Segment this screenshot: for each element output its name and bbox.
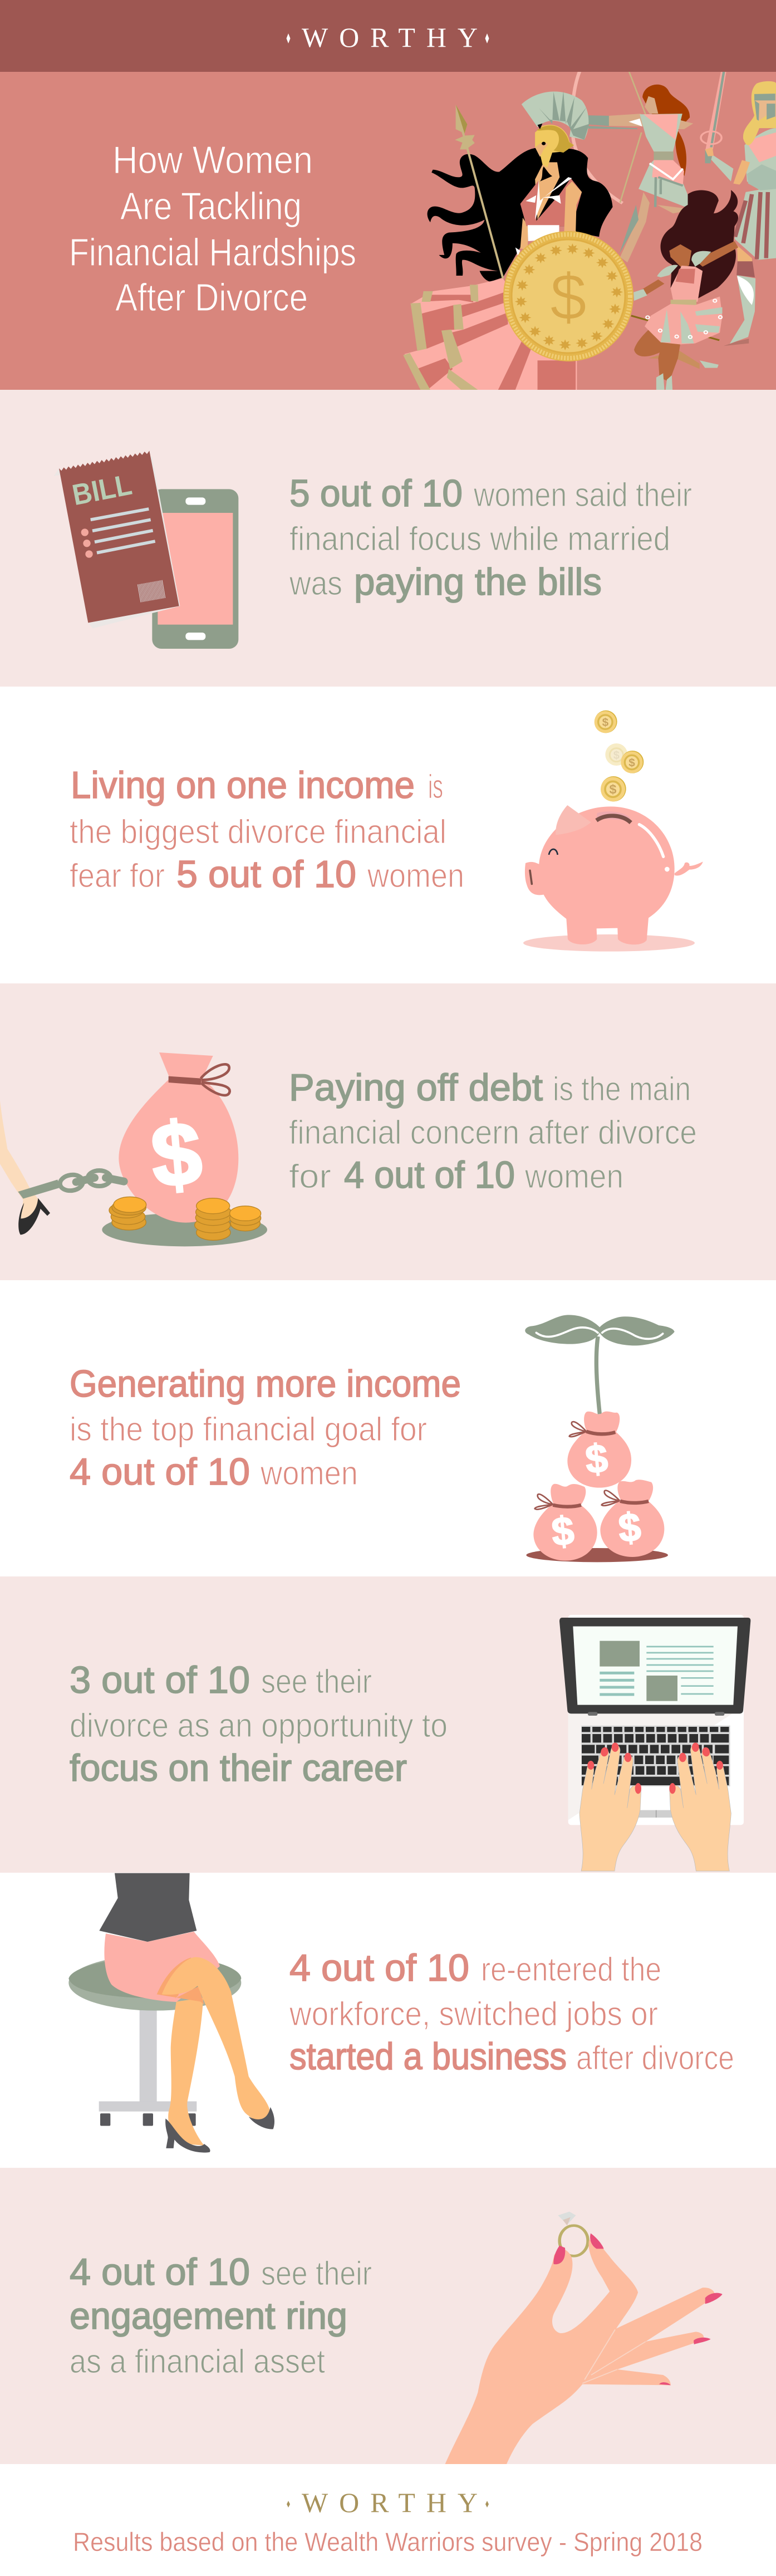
- bill label: BILL: [70, 468, 135, 512]
- shield: gold coin: $: [550, 261, 587, 334]
- panel: living on one income: [0, 687, 776, 983]
- icon: laptop with typing hands: [559, 1615, 750, 1871]
- icon: piggy bank with coins: [523, 711, 703, 952]
- nails: [553, 2234, 723, 2385]
- money bag: right: $: [617, 1505, 642, 1551]
- statement text: is the top financial goal for: [70, 1411, 427, 1448]
- statement text: engagement ring: [70, 2295, 347, 2337]
- icon: money bag chained to ankle: $: [148, 1103, 205, 1206]
- statement text: the biggest divorce financial: [70, 813, 446, 850]
- panel: focus on career: [0, 1576, 776, 1873]
- panel: re-entered the workforce: [0, 1873, 776, 2168]
- statement text: for: [289, 1158, 331, 1195]
- illustration: warrior women: [403, 71, 776, 390]
- statement text: [70, 1363, 461, 1493]
- statement text: is the main: [553, 1070, 691, 1108]
- statement text: focus on their career: [70, 1747, 407, 1789]
- money bag: left: [533, 1484, 597, 1561]
- statement text: [70, 2251, 372, 2380]
- statement text: [289, 1066, 697, 1196]
- archer: [587, 85, 694, 262]
- shield: gold coin: [503, 231, 633, 361]
- statement text: 5 out of 10: [176, 853, 356, 895]
- statement text: [70, 764, 464, 895]
- money bag: top: $: [583, 1436, 610, 1482]
- statement text: Living on one income: [71, 764, 415, 806]
- statement text: 5 out of 10: [289, 472, 463, 515]
- statement text: started a business: [289, 2035, 567, 2078]
- statement text: [70, 1659, 448, 1789]
- statement text: [289, 1947, 734, 2078]
- statement text: women: [524, 1158, 623, 1195]
- falling coins: $: [613, 750, 620, 762]
- icon: money bags with sprout: [525, 1315, 675, 1562]
- money bag: right: [600, 1480, 664, 1557]
- statement text: is: [428, 768, 443, 805]
- statement text: 4 out of 10: [70, 1451, 250, 1493]
- statement text: women: [367, 857, 464, 894]
- crossed leg: [157, 1957, 274, 2129]
- dancer warrior: [631, 190, 738, 390]
- money bag: top: [567, 1412, 631, 1488]
- laptop: [559, 1615, 750, 1825]
- statement text: see their: [261, 2255, 372, 2292]
- main warrior body: [515, 162, 582, 256]
- title: How Women: [112, 138, 313, 182]
- panel: paying off debt: [0, 983, 776, 1280]
- falling coins: $: [610, 782, 617, 797]
- statement text: paying the bills: [354, 561, 602, 603]
- statement text: see their: [261, 1663, 372, 1700]
- bow and string: [572, 71, 646, 203]
- top: [99, 1873, 197, 1942]
- title: Financial Hardships: [69, 231, 356, 274]
- title: [69, 138, 356, 319]
- falling coins: [595, 711, 644, 801]
- right hand: [669, 1742, 731, 1871]
- icon: hand holding ring: [445, 2212, 723, 2464]
- statement text: 4 out of 10: [344, 1154, 515, 1196]
- hand: [445, 2240, 715, 2464]
- header band with logo: [0, 0, 776, 72]
- skirt: [104, 1932, 220, 2002]
- statement text: financial concern after divorce: [289, 1114, 697, 1151]
- main warrior hair: [428, 148, 613, 282]
- statement text: as a financial asset: [70, 2343, 325, 2380]
- statement text: 4 out of 10: [289, 1947, 469, 1989]
- source note: Results based on the Wealth Warriors survey - Spring 2018: [73, 2527, 703, 2557]
- footer: [0, 2464, 776, 2576]
- hero panel: [0, 71, 776, 390]
- logo: WORTHY gold: WORTHY: [302, 2487, 478, 2518]
- statement text: Generating more income: [70, 1363, 461, 1405]
- spear: [455, 105, 503, 278]
- falling coins: $: [628, 756, 635, 769]
- statement text: [289, 472, 692, 603]
- title: Are Tackling: [120, 184, 302, 228]
- statement text: women: [260, 1454, 358, 1492]
- statement text: 4 out of 10: [70, 2251, 250, 2293]
- statement text: was: [289, 565, 342, 602]
- statement text: women said their: [473, 476, 692, 513]
- panel: engagement ring: [0, 2168, 776, 2464]
- panel: generating more income: [0, 1280, 776, 1576]
- panel: paying the bills: [0, 390, 776, 687]
- statement text: divorce as an opportunity to: [70, 1707, 448, 1744]
- statement text: after divorce: [576, 2039, 734, 2077]
- flowing skirt: [403, 278, 577, 390]
- ring: [558, 2212, 588, 2256]
- falling coins: $: [602, 716, 609, 729]
- statement text: financial focus while married: [289, 520, 670, 557]
- coin stacks: [109, 1197, 261, 1240]
- stars ring: [515, 243, 623, 350]
- money bag: left: $: [550, 1509, 576, 1555]
- statement text: re-entered the: [481, 1951, 661, 1988]
- statement text: 3 out of 10: [70, 1659, 250, 1701]
- left hand: [579, 1742, 641, 1871]
- title: After Divorce: [115, 276, 308, 319]
- icon: bill and phone: [54, 450, 238, 649]
- stool: [68, 1955, 241, 2126]
- logo: WORTHY: WORTHY: [302, 22, 478, 53]
- leg and shoe: [0, 1101, 50, 1235]
- statement text: fear for: [70, 857, 165, 894]
- helmet and crest: [522, 91, 590, 168]
- icon: woman seated on stool: [68, 1873, 274, 2153]
- warrior with sword: [701, 71, 776, 346]
- icon: money bag chained to ankle: [0, 1052, 267, 1246]
- standing leg and shoe: [165, 1998, 210, 2153]
- chain: [18, 1171, 124, 1199]
- statement text: Paying off debt: [289, 1066, 543, 1109]
- sprout: [525, 1315, 675, 1414]
- statement text: workforce, switched jobs or: [289, 1995, 658, 2033]
